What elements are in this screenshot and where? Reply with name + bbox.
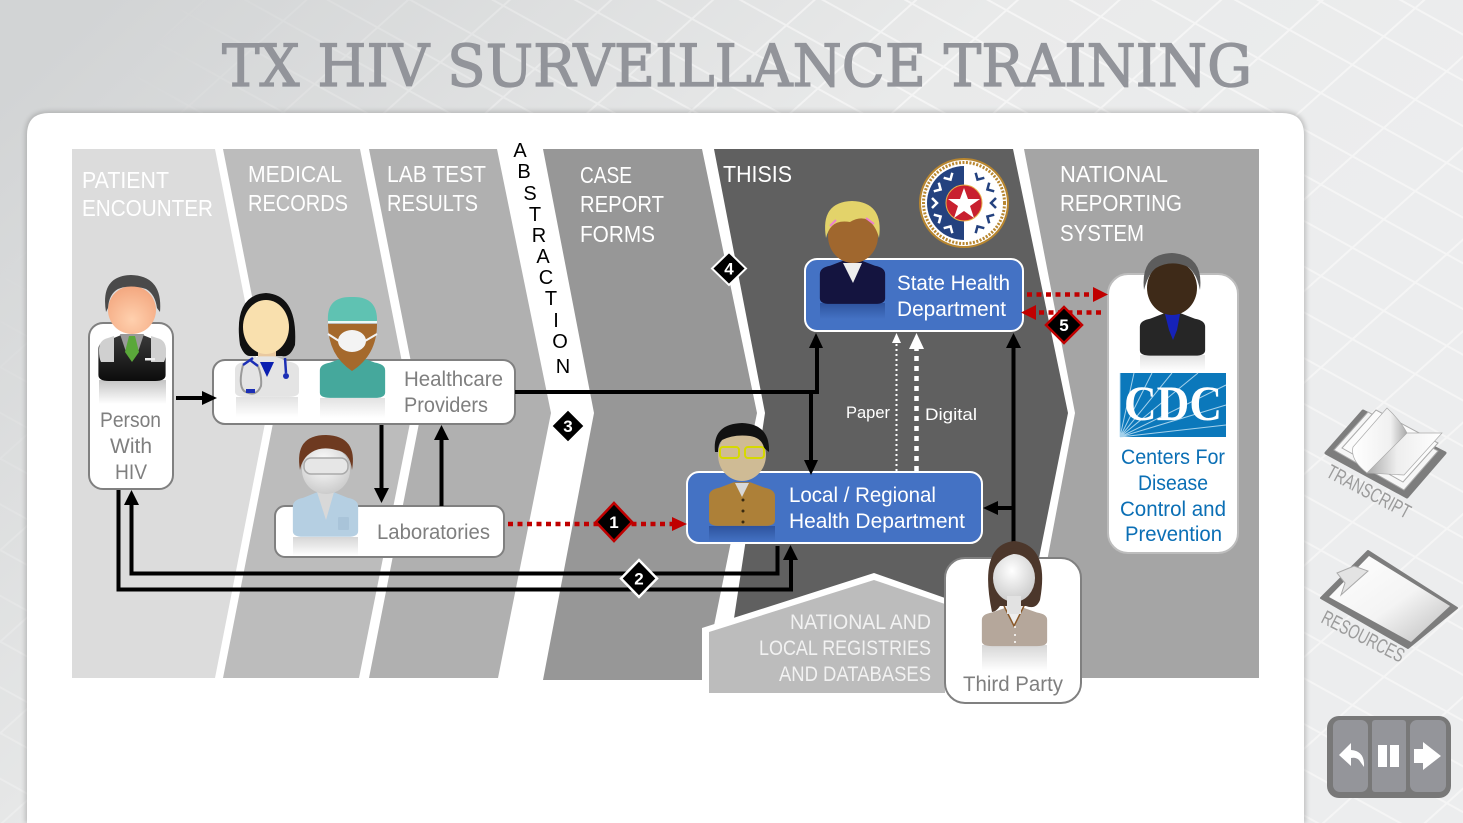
heading: patient encounter: PATIENT [82, 167, 169, 193]
icon: transcript book [1326, 408, 1445, 497]
label: healthcare providers: Providers [404, 394, 488, 417]
arrow: healthcare line to local [804, 392, 818, 475]
label: local health department [789, 484, 965, 533]
label: state health department: State Health [897, 272, 1010, 295]
label: local health department: Health Department [789, 510, 965, 533]
heading: lab test results [387, 161, 486, 216]
label: centers for disease control and prevention: Centers For [1121, 446, 1225, 469]
band: medical records [223, 149, 412, 678]
step 4 diamond [712, 252, 746, 285]
registries label: AND DATABASES [779, 663, 931, 686]
arrow: local to person [124, 490, 778, 574]
heading: national reporting system: SYSTEM [1060, 220, 1144, 246]
heading: abstraction (stepped letters): A [536, 246, 550, 268]
heading: abstraction (stepped letters): C [539, 267, 553, 289]
button: next [1410, 720, 1446, 792]
step 1 diamond: 1 [609, 513, 619, 532]
icon: surgeon [320, 297, 385, 418]
heading: abstraction (stepped letters): N [556, 356, 570, 378]
arrow: person to healthcare [176, 391, 217, 405]
heading: lab test results: RESULTS [387, 190, 478, 216]
third party box [945, 558, 1081, 703]
label: transcript: TRANSCRIPT [1323, 461, 1414, 524]
label: state health department [897, 272, 1010, 321]
arrow: state to CDC (red dotted) [1027, 287, 1108, 302]
icon: resources clipboard [1321, 551, 1457, 648]
button: back [1333, 720, 1368, 792]
step 5 diamond [1046, 307, 1082, 343]
step 3 diamond [552, 410, 584, 442]
heading: medical records [248, 161, 348, 216]
band: lab test results [369, 149, 551, 678]
button: pause [1372, 720, 1406, 792]
icon: patient figure [98, 275, 166, 404]
heading: patient encounter [82, 167, 213, 221]
band headings [82, 161, 1182, 247]
icon: local officer [709, 423, 775, 542]
arrow: third party to state [1006, 333, 1021, 545]
heading: national reporting system: REPORTING [1060, 190, 1182, 216]
heading: abstraction (stepped letters): B [517, 161, 531, 183]
band: case report forms [543, 149, 757, 680]
arrows: black flows [118, 333, 1021, 590]
arrow: CDC to state (red dotted) [1021, 305, 1101, 320]
CDC box [1108, 274, 1238, 553]
label: centers for disease control and prevention [1120, 446, 1226, 546]
heading: medical records: RECORDS [248, 190, 348, 216]
step 3 diamond: 3 [563, 417, 573, 436]
label: centers for disease control and prevention: Disease [1138, 472, 1208, 495]
icon: lab technician [293, 435, 358, 556]
band: patient encounter [72, 149, 267, 678]
heading: lab test results: LAB TEST [387, 161, 486, 187]
heading: abstraction (stepped letters): R [532, 225, 546, 247]
step 1 diamond [596, 503, 632, 541]
icon: third party figure [982, 541, 1047, 671]
heading: case report forms: FORMS [580, 221, 655, 247]
step 2 diamond [621, 560, 657, 597]
heading: abstraction (stepped letters): T [545, 288, 557, 310]
heading: national reporting system [1060, 161, 1182, 246]
arrow: laboratories to local (red dotted) [508, 517, 687, 531]
arrow: healthcare to laboratories [374, 425, 389, 503]
label: paper: Paper [846, 403, 890, 422]
label: digital: Digital [925, 405, 977, 424]
heading: abstraction (stepped letters) [513, 140, 570, 378]
heading: abstraction (stepped letters): S [523, 183, 537, 205]
playback controls [1327, 716, 1451, 798]
label: resources: RESOURCES [1318, 607, 1408, 667]
label: person with HIV: With [110, 435, 152, 458]
local / regional health department box [687, 472, 982, 543]
state health department box [805, 259, 1023, 331]
registries label: NATIONAL AND [790, 611, 931, 634]
laboratories box [275, 506, 504, 557]
CDC logo: CDC [1124, 375, 1222, 431]
step 5 diamond: 5 [1059, 316, 1069, 335]
heading: abstraction (stepped letters): T [529, 204, 541, 226]
label: third party: Third Party [963, 673, 1063, 696]
icon: state officer [820, 201, 885, 319]
heading: case report forms: REPORT [580, 191, 664, 217]
heading: case report forms [580, 162, 664, 247]
label: local health department: Local / Regional [789, 484, 936, 507]
heading: medical records: MEDICAL [248, 161, 342, 187]
heading: THISIS: THISIS [723, 161, 792, 187]
arrow: paper [892, 333, 901, 471]
icon: CDC officer [1140, 253, 1205, 371]
label: person with HIV [100, 409, 161, 484]
state seal [920, 159, 1008, 247]
heading: abstraction (stepped letters): A [513, 140, 527, 162]
arrow: digital [909, 333, 924, 471]
arrow: healthcare to state [515, 333, 823, 392]
registries label: LOCAL REGISTRIES [759, 637, 931, 660]
heading: abstraction (stepped letters): I [553, 310, 559, 332]
heading: national reporting system: NATIONAL [1060, 161, 1168, 187]
label: centers for disease control and prevention: Control and [1120, 498, 1226, 521]
label: state health department: Department [897, 298, 1006, 321]
arrow: laboratories to healthcare [434, 425, 449, 506]
label: person with HIV: HIV [115, 461, 147, 484]
band: THISIS [714, 149, 1068, 678]
step 2 diamond: 2 [634, 570, 644, 588]
label: centers for disease control and prevention: Prevention [1125, 523, 1222, 546]
heading: abstraction (stepped letters): O [552, 331, 568, 353]
registries label [759, 611, 931, 686]
main panel [25, 111, 1306, 823]
band: national reporting system [1024, 149, 1259, 678]
title: TX HIV SURVEILLANCE TRAINING [222, 32, 1252, 100]
person with HIV box [89, 323, 173, 489]
label: healthcare providers [404, 368, 503, 417]
heading: case report forms: CASE [580, 162, 632, 188]
registries block [702, 573, 945, 693]
label: healthcare providers: Healthcare [404, 368, 503, 391]
label: laboratories: Laboratories [377, 521, 490, 544]
label: person with HIV: Person [100, 409, 161, 432]
step 4 diamond: 4 [724, 260, 734, 278]
heading: patient encounter: ENCOUNTER [82, 195, 213, 221]
icon: doctor [235, 293, 299, 417]
process bands [72, 149, 1259, 680]
arrow: person to local [118, 490, 798, 590]
arrow: third party to local [983, 501, 1013, 515]
healthcare providers box [213, 360, 515, 424]
